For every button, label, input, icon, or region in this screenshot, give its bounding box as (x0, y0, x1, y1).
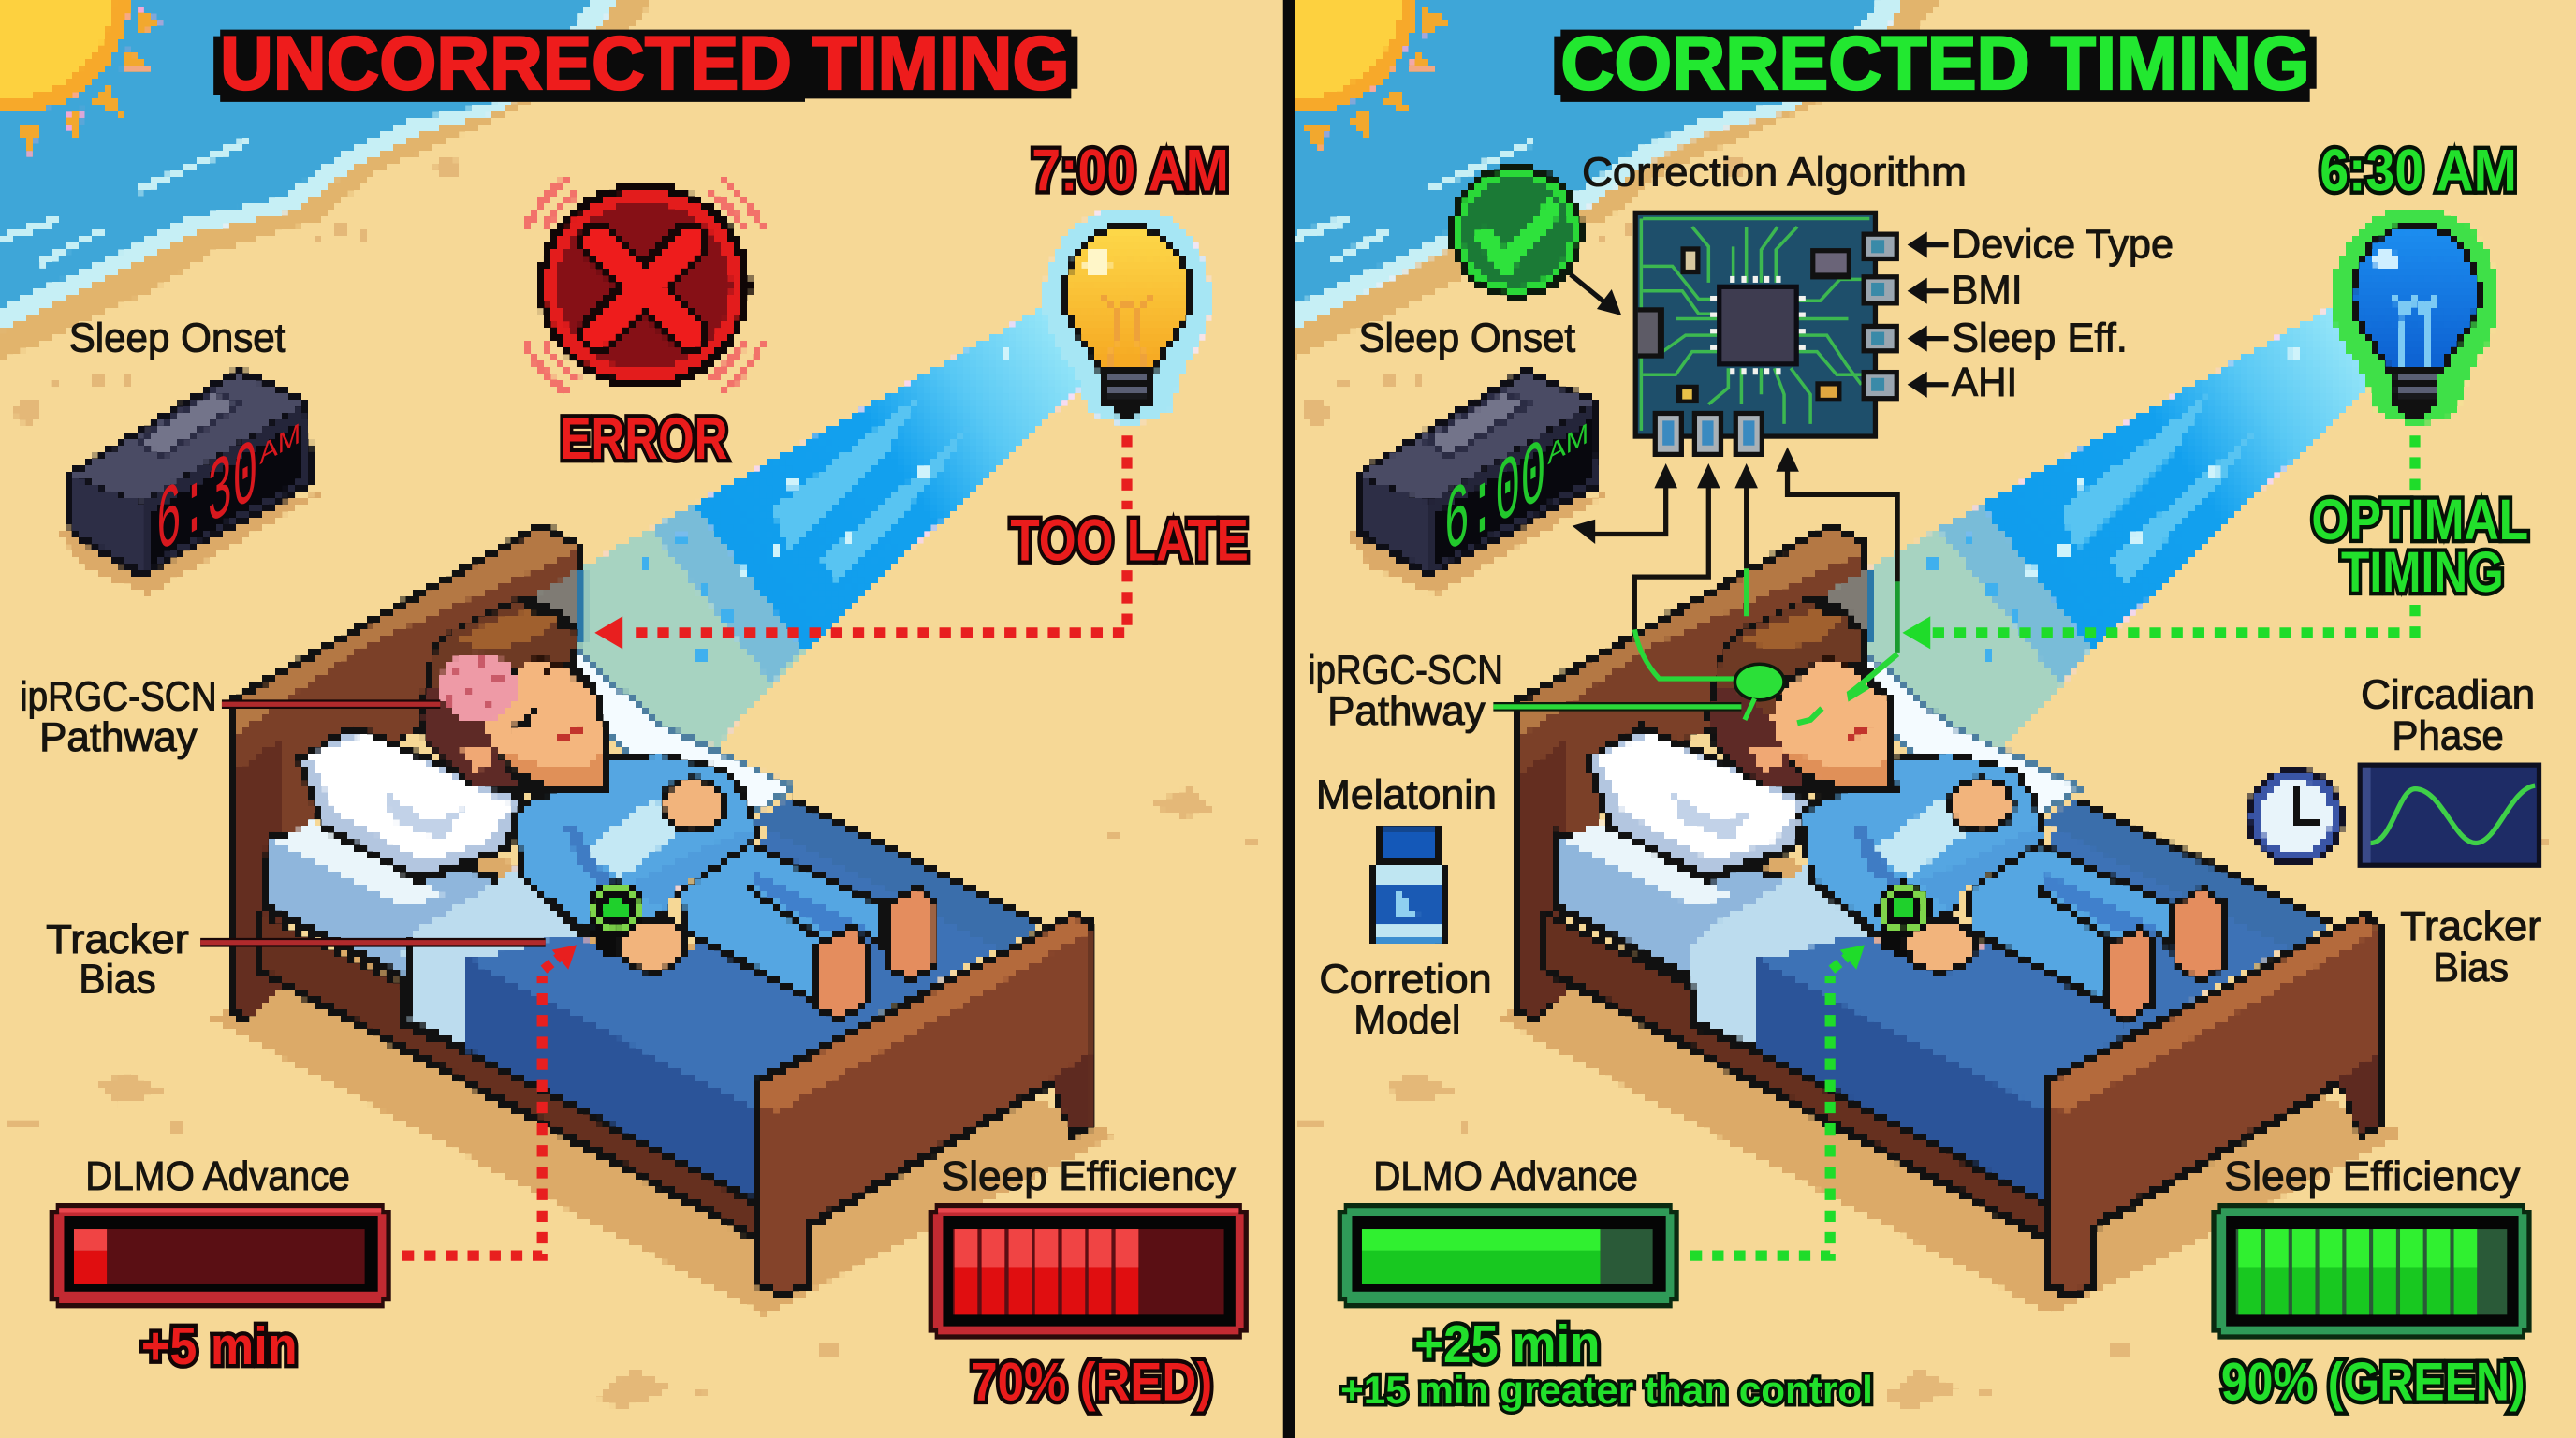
optimal timing label: TIMING (2341, 540, 2504, 605)
title: uncorrected timing: UNCORRECTED TIMING (220, 22, 1070, 106)
icon: blue bulb with green glow (2331, 207, 2499, 424)
value: 70% red: 70% (RED) (971, 1353, 1212, 1413)
arrow: optimal dotted path (1902, 435, 2415, 649)
time: 7:00 am: 7:00 AM (1032, 139, 1229, 204)
clock display: 6:00 green: 6:00 (1444, 421, 1546, 580)
pathway label left: Pathway (39, 714, 198, 760)
circadian phase label: Circadian (2361, 672, 2535, 718)
clock display: 6:30 red: 6:30 (156, 421, 258, 580)
correction model label: Corretion (1319, 956, 1492, 1002)
title: corrected timing: CORRECTED TIMING (1560, 22, 2310, 106)
sleep efficiency label left: Sleep Efficiency (942, 1153, 1236, 1199)
tracker bias label right: Tracker (2400, 903, 2541, 949)
icon: green check badge (1449, 165, 1584, 299)
central processor (1710, 276, 1806, 374)
correction model label (1319, 956, 1492, 1043)
arrow: DLMO to tracker dotted path (402, 945, 577, 1255)
DLMO bar: +25 min (1338, 1203, 1679, 1308)
circuit traces (1641, 218, 1869, 431)
pathway label left: ipRGC-SCN (20, 673, 217, 719)
small components (1638, 246, 1852, 403)
icon: closed eye (511, 710, 534, 728)
tracker bias label left: Bias (79, 956, 156, 1002)
chip inputs: arrows and labels: Sleep Eff. (1952, 315, 2128, 361)
clock display: 6:00 green (1444, 397, 1588, 580)
value: +5 min: +5 min (141, 1316, 298, 1375)
sleeper: pajamas (509, 751, 887, 1005)
divider between panels (1283, 0, 1295, 1438)
pathway label right: ipRGC-SCN (1308, 647, 1503, 693)
too late label: TOO LATE (1010, 508, 1249, 574)
chip inputs: arrows and labels: AHI (1952, 360, 2017, 405)
value: +25 min: +25 min (1414, 1314, 1600, 1373)
DLMO label left: DLMO Advance (85, 1153, 350, 1199)
right connectors (1862, 232, 1899, 401)
pathway label right (1308, 647, 1741, 734)
time: 6:30 am: 6:30 AM (2320, 139, 2517, 204)
tracker bias label left: Tracker (46, 917, 189, 962)
sleeper: feet and hands (592, 779, 936, 1022)
arrow: DLMO to tracker dotted path right (1690, 945, 1865, 1255)
correction algorithm chip (1633, 211, 1899, 457)
icon: yellow bulb with blue glow (1043, 207, 1211, 424)
tracker bias label left (46, 917, 546, 1002)
tracker bias label right (2400, 903, 2541, 990)
clock display: 6:30 red: AM (259, 417, 300, 471)
label: sleep onset right: Sleep Onset (1358, 315, 1575, 361)
clock shadow (56, 493, 322, 594)
DLMO label right: DLMO Advance (1373, 1153, 1638, 1199)
value: 90% green: 90% (GREEN) (2221, 1353, 2525, 1413)
melatonin label: Melatonin (1316, 772, 1497, 818)
blanket (466, 799, 1043, 1203)
optimal timing label: OPTIMAL (2311, 488, 2528, 552)
bottom connectors (1653, 411, 1764, 457)
bed frame side rail (255, 909, 759, 1244)
optimal timing label (2311, 488, 2528, 605)
pillows (296, 644, 794, 884)
alarm clock body (66, 366, 314, 579)
sleep efficiency bar: 70% (929, 1203, 1249, 1340)
beach: wet sand, foam and ocean (0, 0, 654, 361)
sleep efficiency label right: Sleep Efficiency (2224, 1153, 2520, 1199)
label: sleep onset left: Sleep Onset (69, 315, 285, 361)
icon: sun (0, 0, 163, 154)
error label: ERROR (560, 406, 728, 472)
chip inputs: arrows and labels (1908, 222, 2174, 405)
circadian phase label (2361, 672, 2535, 758)
footboard (754, 911, 1097, 1299)
correction algorithm label: Correction Algorithm (1582, 149, 1967, 195)
icon: wall clock (2246, 768, 2345, 866)
note: greater than control: +15 min greater than control (1340, 1368, 1873, 1412)
sand specks (8, 156, 1258, 1410)
sheet (263, 822, 585, 1055)
clock display: 6:30 red (156, 397, 300, 580)
bed shadow (211, 855, 1117, 1314)
sleeper: head (417, 594, 607, 792)
right panel scene copy (1184, 0, 2576, 1438)
clock display: 6:00 green: AM (1547, 417, 1588, 471)
sleep efficiency bar: 90% (2211, 1203, 2532, 1340)
icon: brain (exposed) (439, 653, 518, 722)
arrow: too late dotted path (594, 435, 1127, 649)
arrow: check badge to chip (1571, 274, 1621, 315)
DLMO bar: +5 min (50, 1203, 391, 1308)
pathway label left (20, 673, 440, 760)
icon: error button (525, 178, 763, 393)
scene: beach, bed and sleeper (0, 0, 1288, 1438)
chip inputs: arrows and labels: Device Type (1952, 222, 2174, 268)
headboard and post (227, 521, 581, 1025)
pathway label right: Pathway (1327, 688, 1486, 734)
wiring between sleeper and chip (1573, 447, 1897, 723)
circadian phase chart (2358, 763, 2541, 868)
icon: melatonin bottle (1372, 827, 1444, 944)
icon: wrist tracker (588, 881, 644, 937)
chip inputs: arrows and labels: BMI (1952, 268, 2023, 314)
light beam (526, 298, 1092, 744)
correction model label: Model (1354, 997, 1460, 1043)
tracker bias label right: Bias (2433, 945, 2509, 990)
circadian phase label: Phase (2392, 712, 2504, 758)
